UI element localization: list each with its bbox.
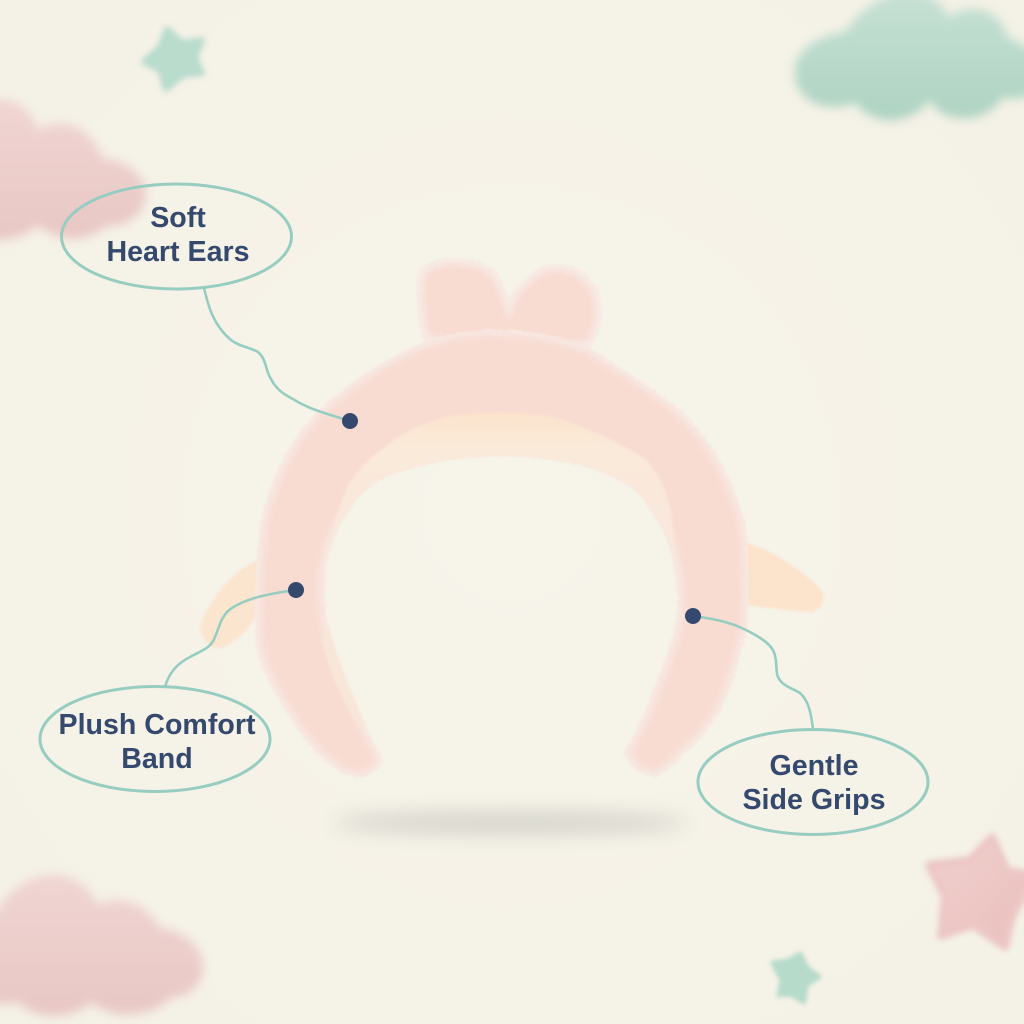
marker dot bbox=[342, 413, 358, 429]
callout: gentle side grips bbox=[685, 608, 928, 834]
decoration: top green star bbox=[144, 29, 202, 89]
label text: Gentle bbox=[770, 750, 858, 782]
label text: Plush Comfort bbox=[59, 709, 256, 741]
label text: Soft bbox=[150, 202, 206, 234]
icon: left side grip bbox=[200, 560, 258, 648]
marker dot bbox=[288, 582, 304, 598]
label oval bbox=[62, 184, 292, 289]
callout: plush comfort band: Band bbox=[121, 743, 193, 775]
decoration: right pink star bbox=[929, 837, 1024, 947]
decoration: bottom left pink cloud bbox=[0, 875, 203, 1016]
decoration: top left pink cloud bbox=[0, 100, 146, 241]
floor shadow bbox=[332, 812, 688, 834]
icon: heart ears bbox=[417, 258, 601, 346]
callout: soft heart ears: Heart Ears bbox=[106, 236, 250, 268]
callout: soft heart ears bbox=[62, 184, 358, 429]
callout: gentle side grips: Side Grips bbox=[742, 784, 886, 816]
band lower left lining stripe bbox=[322, 625, 366, 727]
icon: right side grip bbox=[743, 543, 823, 612]
headband illustration bbox=[200, 255, 823, 790]
callout: plush comfort band bbox=[40, 582, 304, 792]
band inner lining bbox=[327, 413, 677, 587]
connector line bbox=[165, 590, 296, 687]
marker dot bbox=[685, 608, 701, 624]
connector line bbox=[693, 616, 813, 729]
band outer fur bbox=[245, 320, 760, 790]
label oval bbox=[40, 686, 270, 792]
label oval bbox=[698, 730, 928, 834]
decoration: top right green cloud bbox=[795, 0, 1024, 120]
decoration: bottom green star bbox=[773, 954, 819, 1002]
connector line bbox=[204, 288, 350, 421]
